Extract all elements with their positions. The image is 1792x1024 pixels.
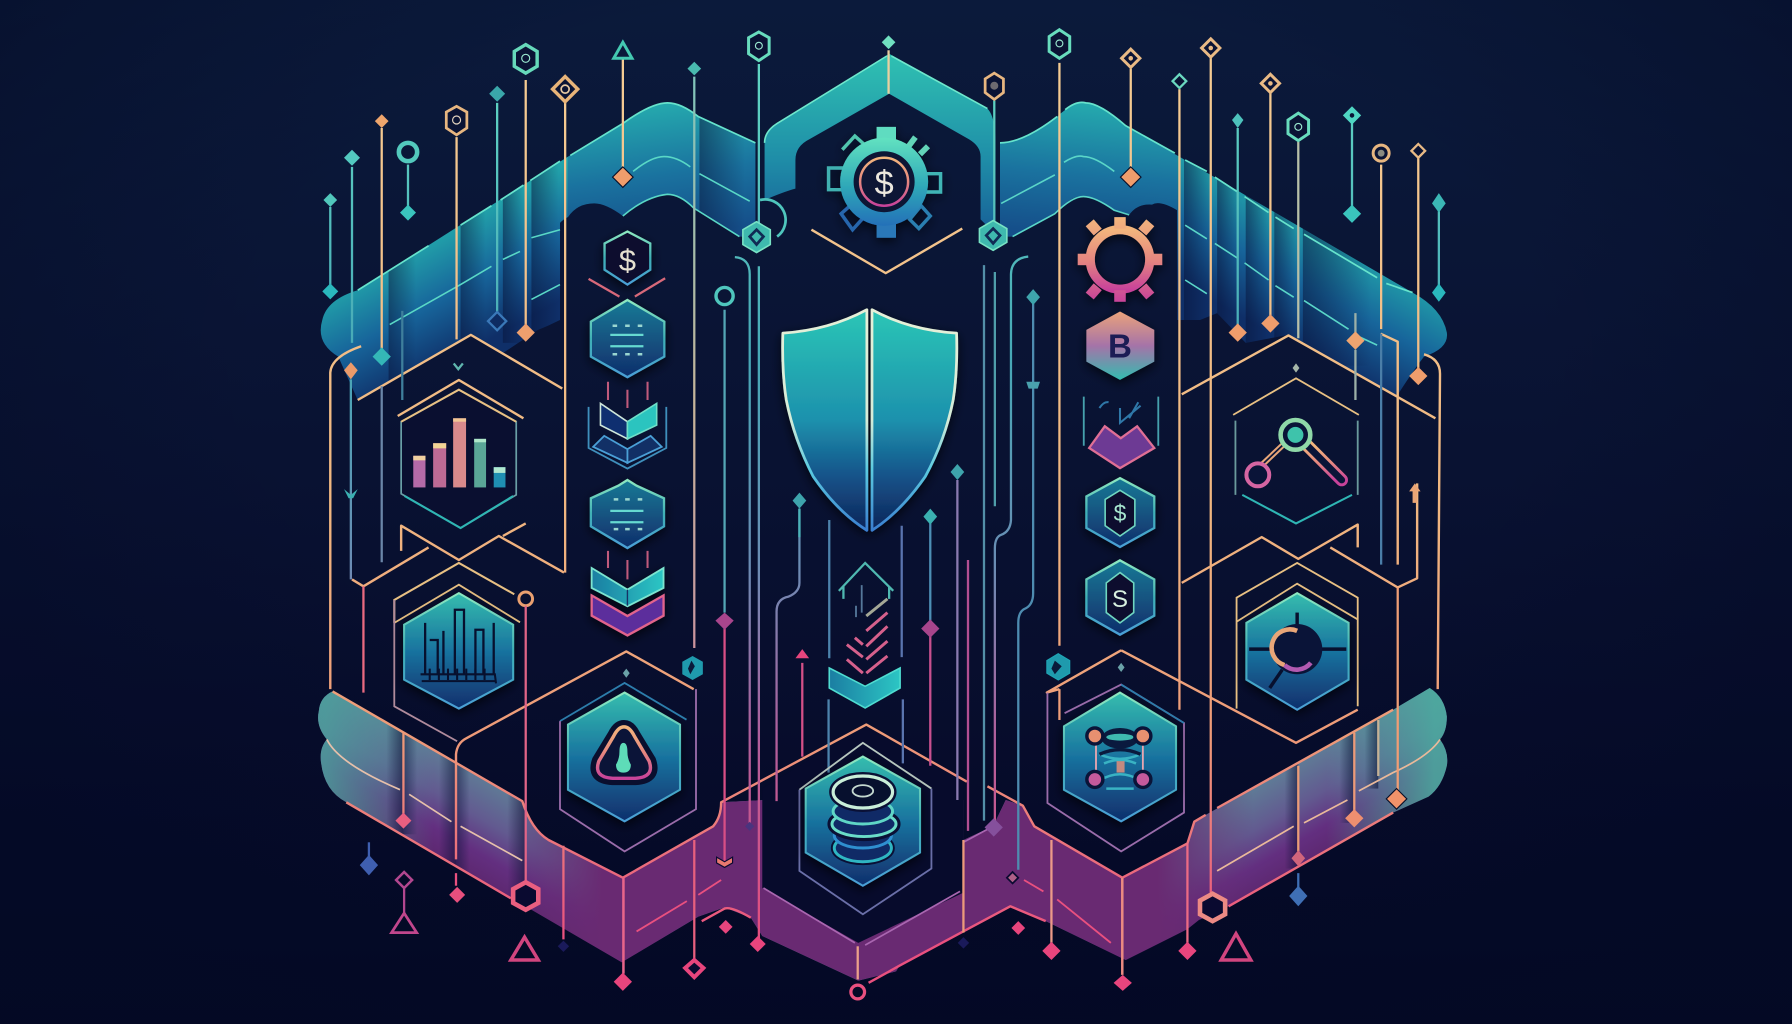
B hexagon: B: [1108, 329, 1132, 366]
right lower target hexagon: [1237, 563, 1358, 710]
left lower chart hexagon: [394, 563, 520, 741]
left chart hexagon panel: [401, 363, 516, 528]
top gear dollar icon: [829, 127, 941, 238]
icon: link nodes: [1246, 420, 1342, 486]
right column coin hex 1: [1086, 478, 1154, 547]
centre up arrow: [829, 563, 900, 708]
right upper link hexagon: [1233, 363, 1359, 523]
lower left nodes: [360, 586, 865, 999]
purple chevron icon: [1084, 397, 1158, 468]
bottom ribbon band: [318, 686, 1447, 981]
left column dollar hex: [605, 232, 650, 285]
lower right nodes: [682, 483, 1421, 991]
line chart icon: [421, 610, 496, 683]
left column dollar hex: $: [619, 243, 636, 278]
small markers centre right: [793, 289, 1040, 949]
left column equation hex 2: [591, 480, 664, 548]
database hexagon panel: [1047, 663, 1184, 851]
coins hexagon panel: [799, 743, 931, 914]
panel outlines: [330, 229, 1440, 983]
right column coin hex 2: S: [1112, 586, 1128, 613]
pins top left: [322, 32, 895, 960]
book chevron icon: [589, 403, 666, 469]
icon: database network: [1087, 728, 1151, 789]
right column coin hex 1: $: [1114, 500, 1127, 526]
centre bottom dark panel: [762, 725, 963, 943]
top ribbon band centre: [765, 54, 995, 234]
inner circuit lines left of shield: [716, 199, 829, 943]
left column equation hex 1: [591, 300, 664, 377]
pins top right: [985, 30, 1446, 960]
icon: coin stack: [831, 775, 897, 862]
icon: target ring: [1249, 613, 1346, 688]
top gear dollar icon: $: [875, 164, 894, 202]
shield: [783, 310, 957, 530]
hex connector nodes near gear: [743, 221, 1007, 253]
B hexagon: [1086, 312, 1154, 380]
right gear icon: [1078, 217, 1162, 302]
teal and purple chevrons: [592, 568, 664, 635]
bar chart: [413, 418, 505, 487]
inner circuit lines right of shield: [799, 257, 1033, 870]
down ticks 2: [608, 551, 648, 579]
top ribbon band left: [321, 103, 755, 411]
red chevron strokes: [589, 278, 665, 297]
down ticks 1: [608, 382, 648, 408]
warning hexagon panel: [560, 669, 696, 851]
icon: warning drop: [595, 725, 653, 781]
top ribbon band right: [1000, 102, 1447, 397]
right column coin hex 2: [1086, 560, 1154, 635]
